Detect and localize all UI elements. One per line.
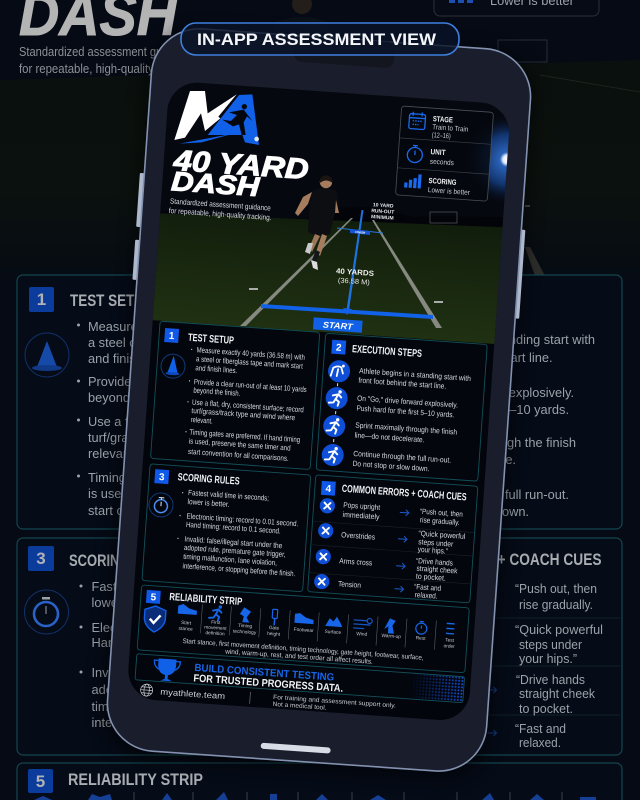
background panel: common errors and coach cues: steps under	[519, 637, 583, 652]
background panel: scoring rules: Electronic timing	[92, 620, 185, 635]
bullets	[184, 345, 309, 464]
heading: RELIABILITY STRIP	[169, 591, 243, 608]
background panel: common errors and coach cues: rise gradually.	[519, 597, 593, 612]
bullets: interference, or stopping before the finish.	[182, 561, 296, 578]
text: scoring: Lower is better	[428, 185, 471, 197]
heading: TEST SETUP	[188, 332, 234, 347]
phone notch	[294, 35, 395, 68]
item: surface: Surface	[324, 629, 342, 636]
text: unit: UNIT	[430, 147, 446, 157]
panel 1: test setup	[151, 321, 320, 469]
item: gate height	[267, 609, 282, 638]
footer: myathlete.team	[160, 687, 225, 701]
icon: stopwatch	[407, 145, 423, 163]
bullets: Measure exactly 40 yards (36.58 m) with	[196, 345, 305, 362]
badge: in-app assessment view	[181, 23, 459, 55]
background panel: common errors and coach cues: “Push out, then	[515, 581, 597, 596]
bullets: start convention for all comparisons.	[188, 447, 289, 463]
step 1: stance icon	[327, 360, 351, 383]
heading: SCORING RULES	[177, 471, 240, 488]
step text: line—do not decelerate.	[354, 431, 425, 444]
background athlete	[270, 0, 334, 48]
item: rest: Rest	[415, 635, 426, 642]
hero labels: FINISH	[355, 230, 365, 235]
item: first movement definition: definition	[205, 630, 225, 637]
text: scoring: SCORING	[428, 176, 457, 187]
item: timing technology: Timing	[238, 623, 253, 630]
background panel: scoring rules: adopted rule	[92, 682, 163, 697]
row: overstrides: “Quick powerful	[418, 529, 466, 541]
text: scoring	[428, 176, 471, 197]
background panel: execution steps: Continue through the full run-out.	[382, 487, 569, 502]
background panel: execution steps: front foot behind the start line.	[383, 350, 552, 365]
row: tension: relaxed.	[414, 590, 438, 601]
caption: Start stance, first movement definition, timing technology, gate height, footwear, surface,	[182, 638, 424, 662]
item: first movement definition	[204, 604, 229, 638]
bullets	[175, 488, 301, 578]
item: first movement definition: movement	[204, 624, 227, 632]
banner: build consistent testing: BUILD CONSISTENT TESTING	[194, 662, 335, 684]
item: rest	[415, 621, 427, 642]
bullets: Timing gates are preferred. If hand timing	[189, 427, 300, 444]
stat card	[396, 106, 493, 201]
item: test order	[443, 623, 457, 650]
row: tension: Tension	[338, 579, 361, 590]
icon: globe	[140, 684, 153, 697]
row: tension: “Fast and	[414, 582, 441, 593]
background panel: test setup: Provide a clear	[88, 374, 174, 389]
background panel: common errors and coach cues: “Drive hands	[516, 672, 585, 687]
background panel: test setup: is used, preserve	[88, 486, 185, 501]
item: wind: Wind	[356, 631, 368, 638]
bullets: and finish lines.	[195, 363, 238, 375]
row: overstrides	[317, 522, 466, 557]
background panel: execution steps: On "Go," drive forward explosively.	[377, 385, 574, 400]
hero: athlete running	[295, 176, 339, 270]
subtitle: for repeatable, high-quality tracking.	[169, 206, 272, 222]
row: pops upright	[319, 498, 463, 527]
step connectors	[334, 383, 338, 442]
background panel: reliability strip: RELIABILITY STRIP	[68, 771, 203, 789]
row: pops upright: “Push out, then	[420, 507, 463, 519]
background panel: execution steps: slow down.	[466, 504, 529, 519]
banner: build consistent testing: FOR TRUSTED PROGRESS DATA.	[193, 672, 344, 695]
background panel: execution steps: Athlete begins in a standing start with	[383, 332, 595, 347]
bullets: lower is better.	[187, 497, 230, 509]
subtitle: Standardized assessment guidance	[170, 197, 271, 213]
badge: in-app assessment view: IN-APP ASSESSMENT VIEW	[197, 30, 437, 49]
heading: EXECUTION STEPS	[352, 343, 422, 360]
background title	[19, 0, 200, 76]
background panel: test setup: turf/grass/track	[88, 430, 173, 445]
number badge 4	[321, 481, 336, 496]
item: warm-up	[381, 618, 403, 640]
item: gate height: height	[267, 631, 281, 638]
item: start stance: Start	[181, 620, 192, 627]
phone body	[104, 26, 534, 774]
row: arms cross: to pocket.	[416, 572, 446, 583]
start pill	[313, 317, 363, 333]
background panel: scoring rules: Invalid: false	[92, 665, 163, 680]
heading: COMMON ERRORS + COACH CUES	[341, 483, 467, 503]
hero labels: RUN-OUT	[371, 208, 394, 216]
number badge 3: 3	[159, 472, 165, 483]
text: unit	[430, 147, 455, 167]
caption: wind, warm-up, rest, and test order all affect results.	[224, 648, 373, 666]
background panel: reliability strip: 5	[36, 772, 45, 791]
panel 3: scoring rules	[142, 464, 311, 592]
number badge 1: 1	[168, 331, 175, 342]
background panel: scoring rules: Hand timing	[92, 635, 160, 650]
title: 40 yard dash: DASH	[170, 166, 261, 202]
background panel: test setup: 1	[37, 290, 46, 309]
step text: On "Go," drive forward explosively.	[357, 394, 458, 410]
row: arms cross: straight cheek	[416, 564, 458, 576]
step 4: run icon	[321, 443, 344, 467]
step text	[352, 366, 471, 476]
step 3: run icon	[322, 414, 346, 438]
bullets: Use a flat, dry, consistent surface; record	[192, 398, 304, 414]
background panel: execution steps	[322, 275, 622, 529]
bullets: adopted rule, premature gate trigger,	[184, 543, 286, 559]
hero labels: 40 YARDS	[336, 266, 374, 278]
row: pops upright: rise gradually.	[420, 515, 460, 527]
item: start stance	[176, 604, 197, 633]
bullets: Fastest valid time in seconds;	[188, 488, 269, 503]
row: arms cross: “Drive hands	[416, 556, 453, 568]
step text: Do not stop or slow down.	[352, 459, 430, 473]
bullets: a steel or fiberglass tape and mark start	[196, 354, 304, 371]
hero labels: MINIMUM	[371, 214, 394, 222]
bullets: Hand timing: record to 0.1 second.	[186, 520, 281, 536]
background panel: test setup: a steel or fiberglass	[88, 335, 199, 350]
background stat card	[434, 0, 599, 16]
icon: shield check	[143, 605, 166, 633]
background title: for repeatable, high-quality tracking.	[19, 61, 200, 76]
text: stage: STAGE	[433, 114, 453, 125]
phone side buttons	[132, 173, 527, 319]
item: timing technology	[233, 607, 259, 636]
item: first movement definition: First	[211, 619, 221, 626]
text: unit: seconds	[430, 157, 455, 167]
icon: cone	[160, 353, 186, 379]
start pill: START	[322, 320, 354, 332]
bullets: relevant.	[191, 415, 213, 426]
text: stage	[431, 114, 469, 142]
item: timing technology: technology	[233, 629, 257, 636]
screen content	[131, 90, 504, 763]
item: test order: order	[443, 643, 455, 650]
background panel: common errors and coach cues: your hips.”	[519, 651, 577, 666]
row: pops upright: Pops upright	[343, 500, 381, 512]
step text: Sprint maximally through the finish	[355, 421, 457, 437]
step text: Athlete begins in a standing start with	[359, 366, 471, 383]
number badge 5	[146, 590, 161, 604]
step text: Push hard for the first 5–10 yards.	[356, 404, 455, 419]
step text: front foot behind the start line.	[358, 376, 447, 391]
item: footwear	[293, 613, 315, 634]
phone: device and screen	[104, 26, 561, 776]
icon: stopwatch	[148, 492, 174, 518]
footer: Not a medical tool.	[272, 701, 327, 712]
row: overstrides: your hips.”	[418, 545, 448, 556]
icon: calendar	[409, 112, 426, 130]
hero: lane lines and markers	[240, 210, 457, 328]
background panel: test setup: beyond the finish.	[88, 390, 188, 405]
footer: For training and assessment support only.	[273, 694, 396, 710]
background panel: test setup	[17, 275, 317, 529]
background panel: test setup: Timing gates are	[88, 470, 183, 485]
background panel: common errors and coach cues: + COACH CUES	[498, 551, 602, 569]
background panel: scoring rules: lower is better.	[92, 595, 174, 610]
title: 40 yard dash: 40 YARD	[172, 145, 310, 186]
panel 5: reliability strip	[137, 585, 469, 673]
background panel: execution steps: Push hard for the first 5–10 yards.	[376, 402, 569, 417]
step 2: run icon	[325, 386, 348, 410]
background panel: scoring rules: interference	[92, 715, 159, 730]
background panel: common errors and coach cues: straight cheek	[519, 686, 596, 701]
bullets: turf/grass/track type and wind where	[191, 406, 296, 422]
number badge 4: 4	[325, 484, 332, 495]
background panel: test setup: Use a flat, dry,	[88, 414, 170, 429]
item: gate height: Gate	[269, 625, 280, 632]
number badge 2: 2	[336, 342, 342, 354]
background panel: scoring rules	[17, 538, 317, 755]
item: wind	[353, 617, 372, 638]
background panel: execution steps: line.	[493, 452, 516, 467]
background panel: execution steps: Sprint maximally through the finish	[380, 435, 576, 450]
logo: MA	[174, 91, 259, 145]
background panel: common errors and coach cues: to pocket.	[519, 701, 573, 716]
row: pops upright: immediately	[342, 510, 380, 521]
background panel: common errors and coach cues: “Quick powerful	[515, 622, 603, 637]
background panel: test setup: and finish lines.	[88, 351, 176, 366]
background panel: test setup: Measure exactly	[88, 319, 182, 334]
background panel: scoring rules: Fastest valid time	[92, 579, 191, 594]
item: footwear: Footwear	[293, 627, 314, 634]
number badge 2	[331, 340, 346, 355]
text: stage: (12–16)	[431, 130, 451, 140]
background title: Standardized assessment guidance	[19, 44, 195, 59]
phone shadow	[100, 27, 538, 783]
banner: build consistent testing	[135, 654, 465, 703]
icon: bars	[404, 173, 422, 189]
bullets: timing malfunction, lane violation,	[183, 552, 277, 567]
item: test order: Test	[445, 637, 455, 644]
background panel: scoring rules: 3	[36, 549, 46, 568]
background panel: test setup: relevant.	[88, 446, 137, 461]
background panel: common errors and coach cues: relaxed.	[519, 735, 561, 750]
background panel: common errors and coach cues	[322, 538, 622, 755]
background panel: reliability strip	[17, 763, 622, 800]
item: surface	[324, 616, 343, 636]
title: 40 yard dash	[170, 145, 310, 206]
background panel: test setup: start convention	[88, 503, 178, 518]
row: arms cross: Arms cross	[339, 556, 373, 568]
background panel: scoring rules: SCORING RULES	[69, 552, 177, 570]
bullets: Invalid: false/illegal start under the	[184, 534, 283, 550]
footer	[140, 684, 396, 717]
background panel: scoring rules: timing malfunction	[92, 699, 195, 714]
background panel: test setup: TEST SETUP	[70, 292, 153, 310]
step text: Continue through the full run-out.	[353, 449, 451, 465]
panel 4: common errors and coach cues	[308, 475, 478, 603]
number badge 5: 5	[150, 592, 157, 604]
text: stage: Train to Train	[432, 122, 469, 134]
number badge 3	[154, 469, 169, 484]
row: overstrides: Overstrides	[341, 530, 376, 542]
item: start stance: stance	[178, 626, 193, 633]
panel 2: execution steps	[316, 333, 487, 481]
row: overstrides: steps under	[418, 537, 454, 549]
background panel: common errors and coach cues: “Fast and	[515, 721, 566, 736]
row: tension	[313, 573, 442, 601]
item: warm-up: Warm-up	[381, 633, 401, 640]
bullets: beyond the finish.	[193, 386, 241, 398]
row: arms cross	[314, 548, 458, 583]
number badge 1	[164, 328, 179, 343]
hero labels: (36.58 M)	[338, 277, 370, 287]
bullets: Provide a clear run-out of at least 10 yards	[194, 377, 307, 394]
screen hero scene	[128, 82, 509, 720]
subtitle	[169, 197, 273, 222]
bullets: is used, preserve the same timer and	[189, 436, 291, 453]
bullets: Electronic timing: record to 0.01 second.	[186, 511, 299, 528]
icon: trophy	[153, 658, 181, 682]
home indicator	[261, 743, 331, 754]
hero labels	[335, 200, 395, 288]
hero labels: 10 YARD	[373, 202, 394, 210]
